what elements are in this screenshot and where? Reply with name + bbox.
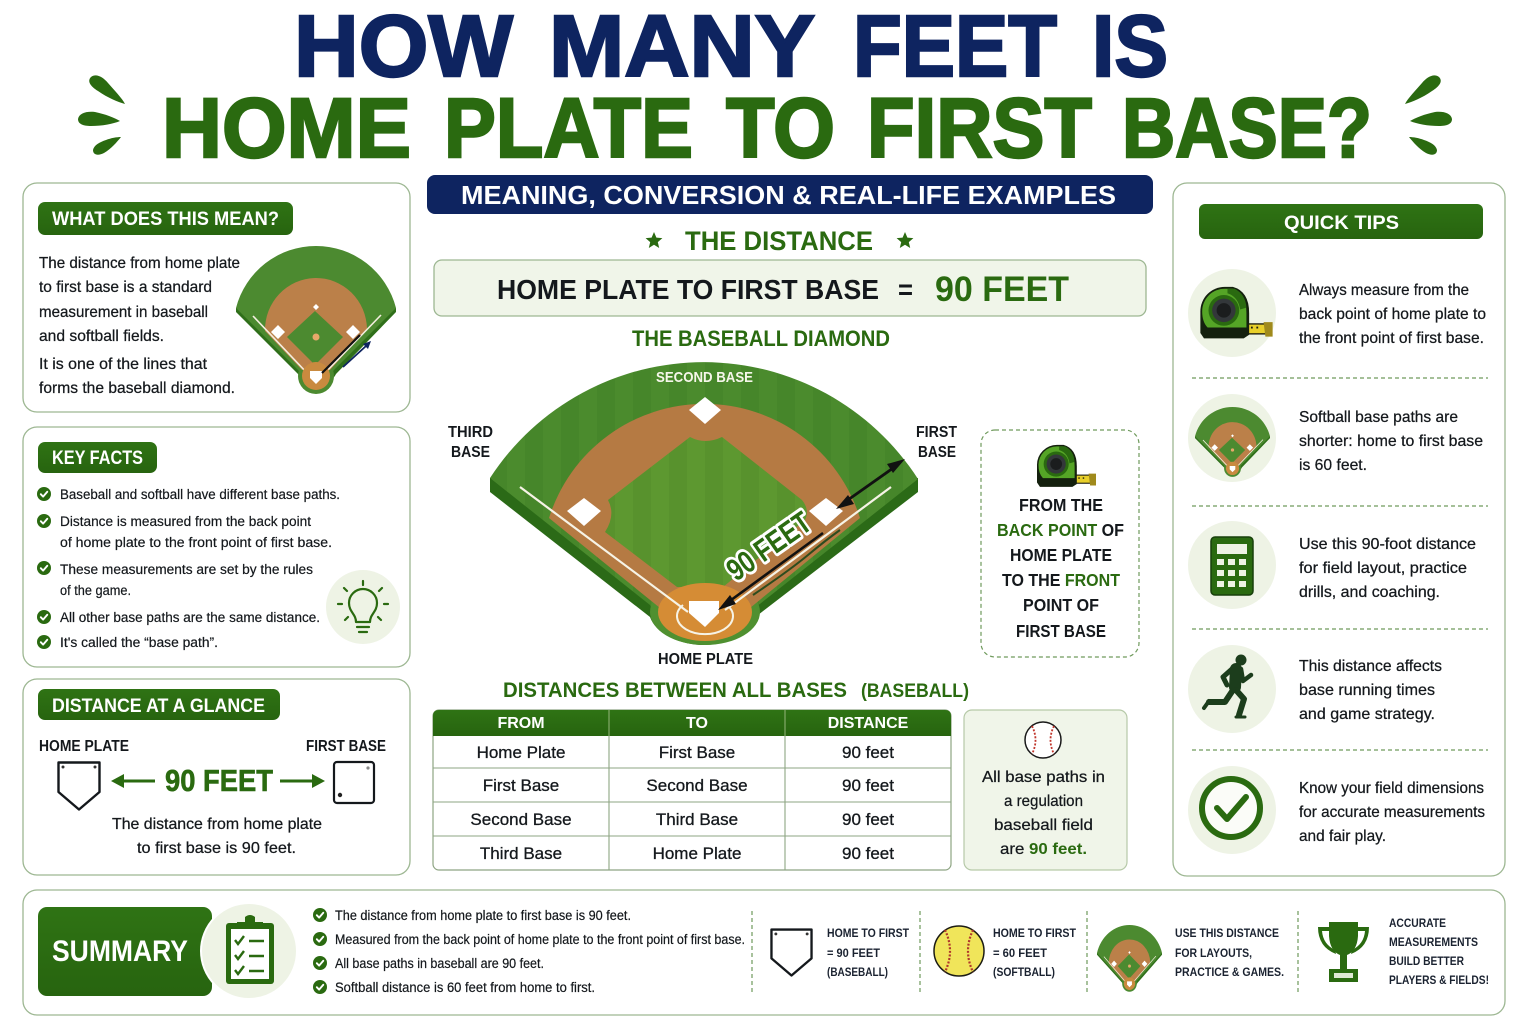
- arrow: left: [111, 774, 155, 788]
- heading: the baseball diamond: THE BASEBALL DIAMOND: [632, 326, 890, 351]
- label: home plate: HOME PLATE: [658, 651, 753, 668]
- title: PLATE: [444, 81, 693, 175]
- table: distances: Second Base: [646, 776, 748, 795]
- table: distances: TO: [686, 715, 708, 732]
- table: distances: 90 feet: [842, 844, 894, 863]
- heading: distances between all bases: (BASEBALL): [861, 681, 969, 702]
- icon: lightbulb: [326, 570, 400, 644]
- list: key facts: of the game.: [60, 583, 131, 598]
- text block: measurement points: BACK POINT OF: [997, 520, 1124, 540]
- title: MANY: [549, 0, 815, 95]
- subtitle banner: MEANING, CONVERSION & REAL-LIFE EXAMPLES: [461, 180, 1116, 210]
- tip: softball base paths: is 60 feet.: [1299, 457, 1367, 474]
- item: use this distance: PRACTICE & GAMES.: [1175, 965, 1284, 979]
- chart: baseball diamond field: [490, 362, 918, 645]
- table: distances: Home Plate: [653, 844, 741, 863]
- text block: all base paths: are 90 feet.: [1000, 841, 1087, 858]
- label: third base: BASE: [451, 444, 490, 461]
- bases: [567, 397, 843, 627]
- subtitle banner: [427, 175, 1153, 214]
- value: 90 feet: 90 FEET: [165, 763, 273, 798]
- text block: measurement points: FROM THE: [1019, 495, 1103, 515]
- home grass surround: [650, 579, 760, 645]
- list: summary points: [313, 908, 745, 995]
- callout: all base paths: [964, 710, 1127, 870]
- icon: clipboard: [201, 903, 297, 999]
- title: HOW: [294, 0, 514, 95]
- item: home to first softball: HOME TO FIRST: [993, 926, 1077, 940]
- table: distances: DISTANCE: [828, 715, 909, 732]
- icon: home plate: [58, 762, 100, 810]
- tip: calculator: Use this 90-foot distance: [1299, 536, 1476, 553]
- arrow: first base double: [836, 459, 905, 509]
- heading: key facts: [38, 442, 157, 473]
- item: home to first baseball: [771, 926, 910, 979]
- decorative burst: right: [1405, 75, 1452, 155]
- text block: all base paths: All base paths in: [982, 769, 1105, 786]
- tip: softball base paths: Softball base paths are: [1299, 409, 1458, 426]
- table: distances: Home Plate: [477, 743, 565, 762]
- heading: distance at a glance: [38, 689, 280, 720]
- heading: what does this mean: [38, 202, 293, 235]
- label: first base: FIRST BASE: [306, 738, 386, 755]
- label: home plate: HOME PLATE: [39, 738, 129, 755]
- item: home to first softball: [934, 926, 1077, 979]
- item: home to first softball: (SOFTBALL): [993, 965, 1055, 979]
- item: trophy: ACCURATE: [1389, 916, 1446, 930]
- text block: meaning: The distance from home plate: [39, 255, 240, 272]
- title: TO: [726, 81, 835, 175]
- tip: softball base paths: shorter: home to first base: [1299, 433, 1483, 450]
- item: home to first baseball: HOME TO FIRST: [827, 926, 910, 940]
- list: summary points: Measured from the back point of home plate to the front point of first base.: [335, 932, 745, 947]
- label: second base: SECOND BASE: [656, 369, 753, 386]
- callout: 90 feet equation: HOME PLATE TO FIRST BASE: [497, 274, 879, 305]
- item: home to first baseball: = 90 FEET: [827, 946, 881, 960]
- text block: glance description: to first base is 90 feet.: [137, 840, 296, 857]
- text block: measurement points: HOME PLATE: [1010, 545, 1112, 565]
- list: key facts: All other base paths are the same distance.: [60, 610, 320, 625]
- panel: what does this mean: [23, 183, 410, 412]
- table: distances: First Base: [483, 776, 559, 795]
- heading: distances between all bases: DISTANCES BETWEEN ALL BASES: [503, 679, 847, 702]
- text block: all base paths: a regulation: [1004, 793, 1083, 810]
- text block: measurement points: FIRST BASE: [1016, 621, 1106, 641]
- arrow: home plate to first base: [718, 533, 823, 610]
- table: distances: Third Base: [656, 810, 738, 829]
- text block: glance description: The distance from home plate: [112, 816, 322, 833]
- title: BASE?: [1122, 81, 1372, 175]
- panel: quick tips: [1173, 183, 1505, 876]
- text block: all base paths: baseball field: [994, 817, 1093, 834]
- tip: tape measure: [1188, 269, 1486, 357]
- tip: calculator: drills, and coaching.: [1299, 584, 1440, 601]
- heading: distance at a glance: DISTANCE AT A GLANCE: [52, 696, 265, 717]
- title: HOME: [162, 81, 411, 175]
- tip: tape measure: back point of home plate to: [1299, 306, 1486, 323]
- callout: 90 feet equation: 90 FEET: [935, 270, 1069, 309]
- callout: 90 feet equation: [434, 260, 1146, 316]
- tip: check mark: for accurate measurements: [1299, 804, 1485, 821]
- table: distances: 90 feet: [842, 810, 894, 829]
- text block: meaning: It is one of the lines that: [39, 356, 208, 373]
- tip: calculator: for field layout, practice: [1299, 560, 1467, 577]
- label: first base: FIRST: [916, 424, 957, 441]
- heading: quick tips: QUICK TIPS: [1284, 213, 1399, 234]
- outfield grass: [490, 362, 918, 630]
- title: FEET: [853, 0, 1057, 95]
- batter circle: [677, 605, 733, 634]
- infield dirt: [549, 404, 860, 608]
- text block: measurement points: POINT OF: [1023, 595, 1099, 615]
- title: FIRST: [867, 81, 1092, 175]
- item: trophy: MEASUREMENTS: [1389, 935, 1478, 949]
- field side edge: [490, 478, 918, 645]
- item: use this distance: [1097, 925, 1284, 992]
- item: trophy: [1318, 916, 1489, 987]
- tip: check mark: [1188, 766, 1485, 854]
- list: key facts: [37, 487, 340, 650]
- text block: measurement points: [997, 495, 1124, 641]
- table: distances: First Base: [659, 743, 735, 762]
- icon: small baseball field: [236, 246, 396, 394]
- tip: tape measure: Always measure from the: [1299, 282, 1469, 299]
- label: third base: [448, 424, 493, 461]
- table: distances: [433, 710, 951, 870]
- table: distances: Second Base: [470, 810, 572, 829]
- tip: runner: base running times: [1299, 682, 1435, 699]
- infield grass: [605, 437, 807, 587]
- tip: runner: This distance affects: [1299, 658, 1442, 675]
- tip: runner: [1188, 645, 1442, 733]
- text block: glance description: [112, 816, 322, 857]
- text block: meaning: measurement in baseball: [39, 304, 208, 321]
- heading: what does this mean: WHAT DOES THIS MEAN?: [52, 209, 279, 230]
- table: distances: Third Base: [480, 844, 562, 863]
- text block: meaning: and softball fields.: [39, 328, 164, 345]
- table: distances: 90 feet: [842, 776, 894, 795]
- panel: key facts: [23, 427, 410, 667]
- tip: check mark: and fair play.: [1299, 828, 1386, 845]
- tip: calculator: [1188, 521, 1476, 609]
- heading: key facts: KEY FACTS: [52, 448, 143, 469]
- panel: summary: [23, 890, 1505, 1015]
- item: trophy: BUILD BETTER: [1389, 954, 1464, 968]
- heading: summary: SUMMARY: [52, 935, 188, 968]
- list: summary points: The distance from home plate to first base is 90 feet.: [335, 908, 631, 923]
- icon: tape measure: [1037, 445, 1096, 487]
- tip: check mark: Know your field dimensions: [1299, 780, 1484, 797]
- heading: summary: [38, 907, 212, 996]
- table: distances: 90 feet: [842, 743, 894, 762]
- list: key facts: These measurements are set by the rules: [60, 562, 313, 577]
- text block: meaning: forms the baseball diamond.: [39, 380, 235, 397]
- list: key facts: Baseball and softball have different base paths.: [60, 487, 340, 502]
- tip: softball base paths: [1188, 394, 1483, 482]
- heading: quick tips: [1199, 204, 1483, 239]
- table: distances: FROM: [497, 715, 545, 732]
- item: use this distance: USE THIS DISTANCE: [1175, 926, 1279, 940]
- item: trophy: PLAYERS & FIELDS!: [1389, 973, 1489, 987]
- list: key facts: It's called the “base path”.: [60, 635, 218, 650]
- tip: runner: and game strategy.: [1299, 706, 1435, 723]
- item: home to first baseball: (BASEBALL): [827, 965, 888, 979]
- list: key facts: Distance is measured from the back point: [60, 514, 311, 529]
- label: first base: [916, 424, 957, 461]
- icon: baseball: [1025, 722, 1061, 758]
- callout: measurement points: [981, 430, 1139, 657]
- text block: meaning: to first base is a standard: [39, 279, 212, 296]
- text block: all base paths: [982, 769, 1105, 858]
- text block: meaning: [39, 255, 240, 397]
- arrow: right: [280, 774, 325, 788]
- tip: tape measure: the front point of first base.: [1299, 330, 1484, 347]
- label: first base: BASE: [918, 444, 956, 461]
- list: key facts: of home plate to the front point of first base.: [60, 535, 332, 550]
- panel: distance at a glance: [23, 679, 410, 875]
- callout: 90 feet equation: =: [898, 274, 913, 305]
- label: 90 feet: 90 FEET: [720, 505, 818, 588]
- item: home to first softball: = 60 FEET: [993, 946, 1048, 960]
- decorative burst: left: [78, 75, 125, 155]
- list: summary points: All base paths in baseball are 90 feet.: [335, 956, 544, 971]
- list: summary points: Softball distance is 60 feet from home to first.: [335, 980, 595, 995]
- label: third base: THIRD: [448, 424, 493, 441]
- item: use this distance: FOR LAYOUTS,: [1175, 946, 1252, 960]
- heading: the distance: THE DISTANCE: [685, 226, 873, 256]
- title: [162, 0, 1372, 175]
- smudge: [753, 530, 840, 595]
- foul lines: [520, 487, 891, 612]
- home dirt: [658, 583, 752, 641]
- text block: measurement points: TO THE FRONT: [1002, 570, 1120, 590]
- icon: first base: [334, 762, 374, 803]
- title: IS: [1092, 0, 1168, 95]
